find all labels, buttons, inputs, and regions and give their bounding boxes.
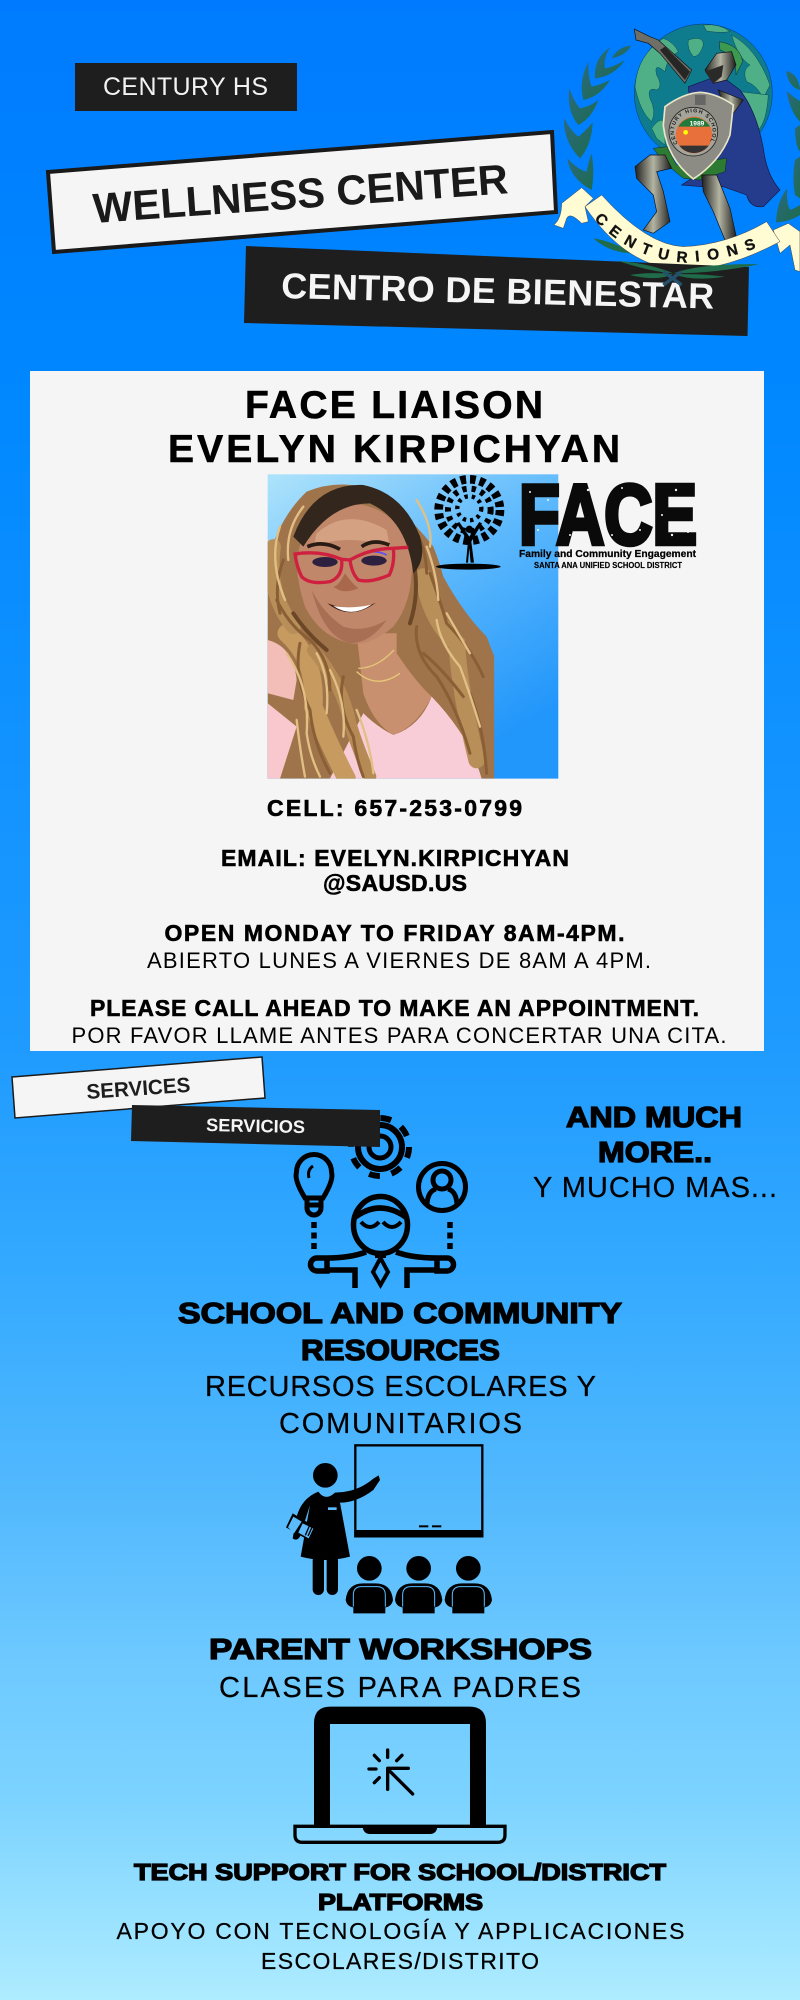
label: services: SERVICES — [86, 1074, 191, 1104]
leaves under banner — [593, 238, 758, 273]
laurel right — [776, 71, 800, 222]
service: school and community resources: RECURSOS ESCOLARES Y — [205, 1371, 596, 1403]
globe — [634, 24, 772, 163]
face logo: SANTA ANA UNIFIED SCHOOL DISTRICT — [534, 561, 682, 570]
brows and eyes — [307, 542, 389, 567]
smile — [327, 603, 376, 612]
contact text: CELL: 657-253-0799 — [267, 795, 522, 821]
icon: family tree of hands — [436, 479, 501, 570]
opening hours: ABIERTO LUNES A VIERNES DE 8AM A 4PM. — [147, 948, 651, 973]
service: tech support — [116, 1859, 684, 1974]
label: servicios: SERVICIOS — [206, 1115, 305, 1137]
service: tech support: ESCOLARES/DISTRITO — [261, 1948, 539, 1974]
service: parent workshops: PARENT WORKSHOPS — [209, 1634, 592, 1666]
service: tech support: APOYO CON TECNOLOGÍA Y APPLICACIONES — [116, 1918, 684, 1944]
shield — [662, 92, 734, 180]
label: century hs: CENTURY HS — [103, 73, 268, 101]
cursor click — [369, 1750, 413, 1794]
contact text — [221, 795, 569, 896]
red glasses — [295, 547, 408, 583]
school crest logo — [554, 24, 800, 272]
title banner: centro de bienestar — [244, 246, 749, 336]
panel: face liaison contact — [30, 371, 764, 1051]
service: school and community resources: COMUNITARIOS — [279, 1408, 522, 1440]
service: school and community resources: SCHOOL AND COMMUNITY — [178, 1298, 622, 1330]
thinking figure — [311, 1196, 454, 1288]
shield: 1989 — [690, 120, 705, 127]
contact text: EMAIL: EVELYN.KIRPICHYAN — [221, 845, 569, 871]
left leg — [635, 155, 672, 233]
contact text: @SAUSD.US — [323, 870, 467, 896]
wordmark: FACE — [519, 468, 697, 563]
portrait photo — [268, 474, 558, 779]
title banner: centro de bienestar: CENTRO DE BIENESTAR — [281, 265, 715, 317]
opening hours: OPEN MONDAY TO FRIDAY 8AM-4PM. — [164, 920, 624, 946]
appointment note: PLEASE CALL AHEAD TO MAKE AN APPOINTMENT. — [90, 995, 699, 1021]
screen — [314, 1707, 486, 1825]
icon: person with gear, bulb and user — [296, 1118, 466, 1288]
title banner: wellness center: WELLNESS CENTER — [91, 155, 510, 232]
shield: CENTURY HIGH SCHOOL — [670, 108, 716, 144]
right leg — [702, 175, 737, 240]
speckles — [529, 487, 689, 536]
helmet — [705, 42, 743, 83]
banner — [554, 187, 800, 272]
heading: liaison name: FACE LIAISON — [245, 384, 543, 427]
panel background — [30, 371, 764, 1051]
heading: liaison name: EVELYN KIRPICHYAN — [168, 428, 620, 471]
callout: and much more: AND MUCH — [566, 1102, 742, 1134]
face logo — [436, 468, 697, 570]
heading: liaison name — [168, 384, 620, 471]
banner: CENTURIONS — [596, 214, 756, 263]
service: tech support: PLATFORMS — [318, 1889, 483, 1915]
icon: laptop with cursor — [295, 1707, 505, 1842]
label: century hs — [75, 63, 297, 111]
label: services — [12, 1057, 265, 1118]
service: school and community resources — [178, 1298, 622, 1440]
service: parent workshops: CLASES PARA PADRES — [219, 1672, 581, 1704]
leaves overlapping black banner — [618, 261, 758, 285]
service: tech support: TECH SUPPORT FOR SCHOOL/DISTRICT — [134, 1859, 666, 1885]
label: servicios — [131, 1105, 380, 1147]
appointment note — [72, 995, 726, 1048]
face logo: Family and Community Engagement — [519, 548, 696, 560]
base — [295, 1826, 505, 1842]
icon: teacher at board with students — [286, 1445, 492, 1613]
chalkboard — [354, 1445, 483, 1537]
service: parent workshops — [209, 1634, 592, 1704]
teacher — [286, 1463, 380, 1595]
callout: and much more — [533, 1102, 777, 1204]
gear — [351, 1118, 409, 1176]
callout: and much more: MORE.. — [598, 1137, 712, 1169]
cape — [682, 75, 780, 207]
service: school and community resources: RESOURCES — [301, 1335, 500, 1367]
user badge — [418, 1164, 466, 1210]
opening hours — [147, 920, 651, 973]
callout: and much more: Y MUCHO MAS... — [533, 1172, 777, 1204]
knight arm — [634, 29, 692, 83]
students — [346, 1556, 492, 1613]
hand on hip — [718, 90, 743, 113]
bulb — [296, 1154, 332, 1215]
green skirt — [653, 147, 727, 180]
title banner: wellness center — [48, 132, 556, 252]
appointment note: POR FAVOR LLAME ANTES PARA CONCERTAR UNA CITA. — [72, 1023, 726, 1048]
laurel left — [564, 46, 631, 190]
